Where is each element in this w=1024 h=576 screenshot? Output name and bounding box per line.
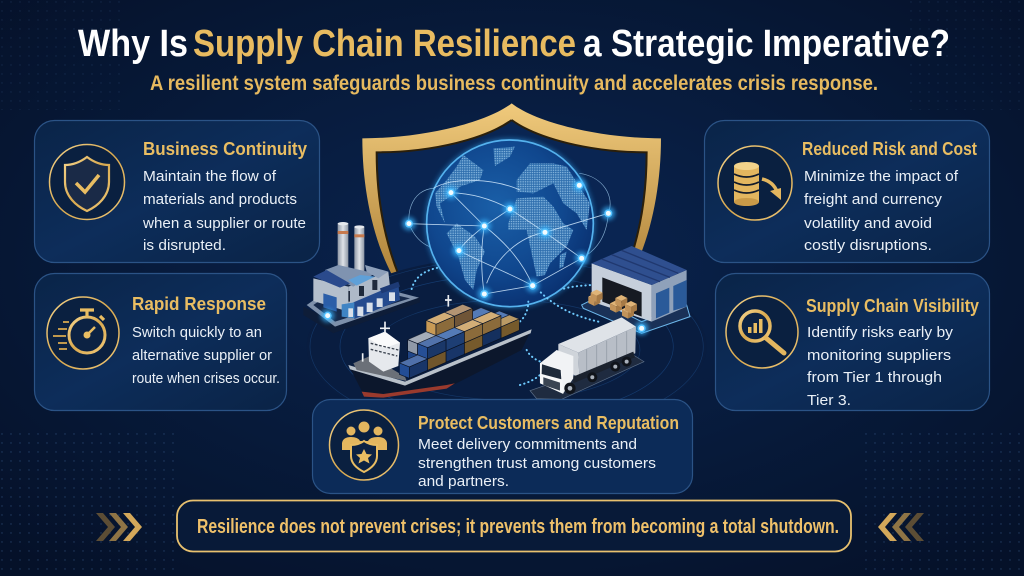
takeaway banner xyxy=(177,500,851,552)
body text xyxy=(804,168,959,254)
body text: Identify risks early by xyxy=(807,324,954,341)
icon: shield with check xyxy=(50,144,124,220)
icon: stopwatch xyxy=(47,297,119,369)
body text: monitoring suppliers xyxy=(807,347,951,364)
outer network arcs xyxy=(409,173,610,258)
heading: Protect Customers and Reputation xyxy=(418,413,679,433)
body text: Tier 3. xyxy=(807,392,851,409)
heading: Business Continuity xyxy=(143,139,307,159)
globe xyxy=(402,139,615,308)
ground platform xyxy=(307,257,707,437)
icon: coins with down arrow xyxy=(718,146,792,220)
icon: magnifier with bars xyxy=(726,296,798,368)
dotted routes xyxy=(412,267,598,385)
takeaway banner: Resilience does not prevent crises; it prevents them from becoming a total shutdown. xyxy=(197,516,839,538)
heading: Reduced Risk and Cost xyxy=(802,139,977,159)
panel: supply chain visibility xyxy=(716,274,990,410)
network nodes xyxy=(402,179,615,301)
panel: business continuity xyxy=(34,120,320,262)
landmasses xyxy=(435,147,590,290)
heading: Supply Chain Visibility xyxy=(806,296,979,316)
heading: Rapid Response xyxy=(132,294,266,314)
container ship xyxy=(348,295,532,398)
body text: from Tier 1 through xyxy=(807,369,942,386)
icon: people with shield xyxy=(330,410,398,480)
factory xyxy=(303,222,420,333)
right chevrons xyxy=(878,513,924,541)
shield xyxy=(362,103,661,297)
body text xyxy=(132,324,280,387)
central illustration xyxy=(303,103,707,437)
body text: materials and products xyxy=(143,191,297,208)
body text: strengthen trust among customers xyxy=(418,455,656,472)
truck xyxy=(530,317,644,399)
globe network lines xyxy=(409,180,608,294)
body text: is disrupted. xyxy=(143,237,226,254)
body text: Maintain the flow of xyxy=(143,168,277,185)
body text: route when crises occur. xyxy=(132,370,280,387)
panel: reduced risk and cost xyxy=(704,120,990,262)
body text: and partners. xyxy=(418,473,509,490)
body text xyxy=(142,168,306,254)
body text xyxy=(807,324,954,409)
title: a Strategic Imperative? xyxy=(583,23,950,65)
panel: rapid response xyxy=(34,274,286,410)
body text: freight and currency xyxy=(804,191,943,208)
title: Why Is xyxy=(78,23,188,65)
title xyxy=(78,23,950,65)
body text: Switch quickly to an xyxy=(132,324,262,341)
body text: costly disruptions. xyxy=(804,237,932,254)
subtitle: A resilient system safeguards business continuity and accelerates crisis response. xyxy=(150,72,878,95)
body text xyxy=(418,436,656,490)
title: Supply Chain Resilience xyxy=(193,23,576,65)
body text: when a supplier or route xyxy=(142,215,306,232)
panel: protect customers and reputation xyxy=(312,400,692,494)
body text: alternative supplier or xyxy=(132,347,272,364)
body text: Minimize the impact of xyxy=(804,168,959,185)
left chevrons xyxy=(96,513,142,541)
body text: volatility and avoid xyxy=(804,215,932,232)
warehouse xyxy=(582,246,690,335)
body text: Meet delivery commitments and xyxy=(418,436,637,453)
